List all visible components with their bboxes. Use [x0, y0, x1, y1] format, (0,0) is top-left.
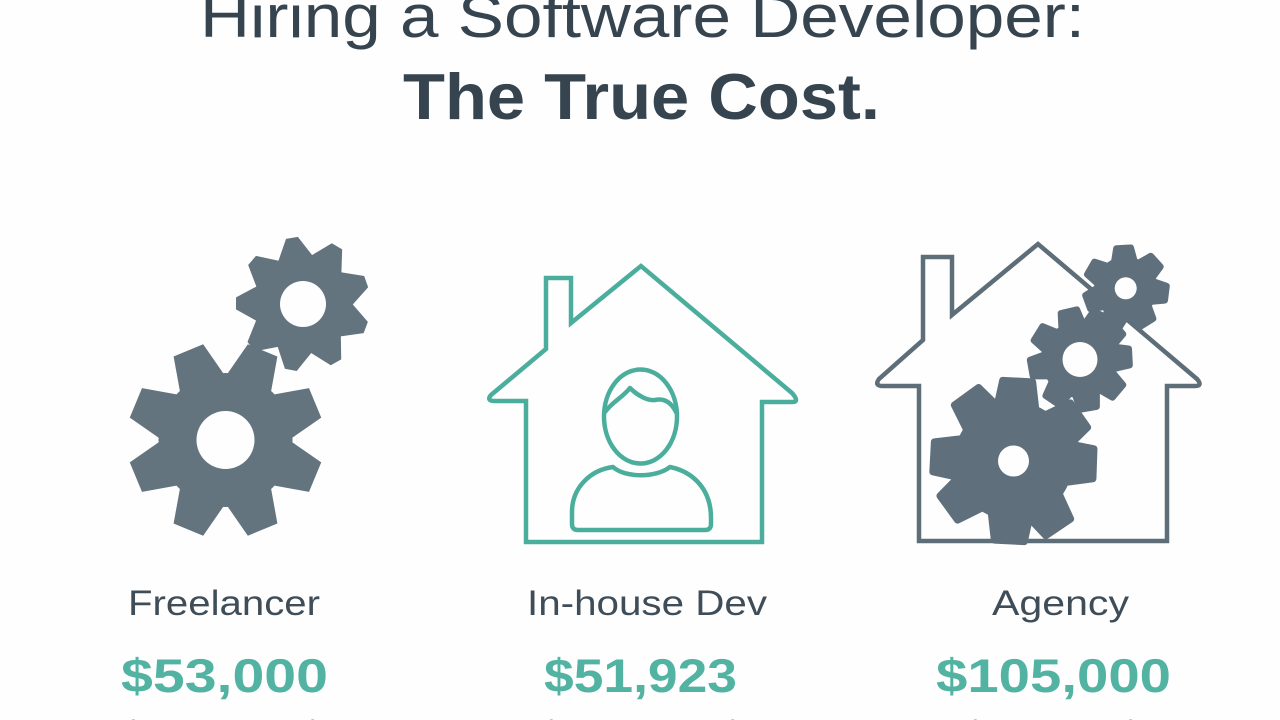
small gear [236, 235, 372, 373]
icon: house with gears [877, 244, 1200, 542]
panel: agency [877, 244, 1200, 720]
panel: in-house developer [489, 266, 796, 720]
house outline [877, 244, 1200, 541]
price: in-house dev: $51,923 [544, 649, 737, 702]
top gear [1085, 248, 1167, 329]
house outline [489, 266, 796, 542]
price: freelancer: $53,000 [121, 649, 328, 702]
person hair [605, 388, 676, 412]
price: agency: $105,000 [936, 649, 1171, 702]
person shoulders [572, 467, 711, 530]
middle gear [1030, 309, 1130, 410]
icon: house with person [489, 266, 796, 542]
title line 2: The True Cost. [403, 60, 880, 133]
large gear [933, 380, 1094, 542]
panel: freelancer [121, 235, 372, 720]
title [200, 0, 1085, 133]
label: agency: Agency [992, 584, 1130, 623]
icon: freelancer gears [127, 235, 372, 539]
large gear [127, 341, 324, 539]
person head [604, 370, 677, 464]
label: freelancer: Freelancer [128, 584, 320, 623]
label: in-house dev: In-house Dev [527, 584, 768, 623]
